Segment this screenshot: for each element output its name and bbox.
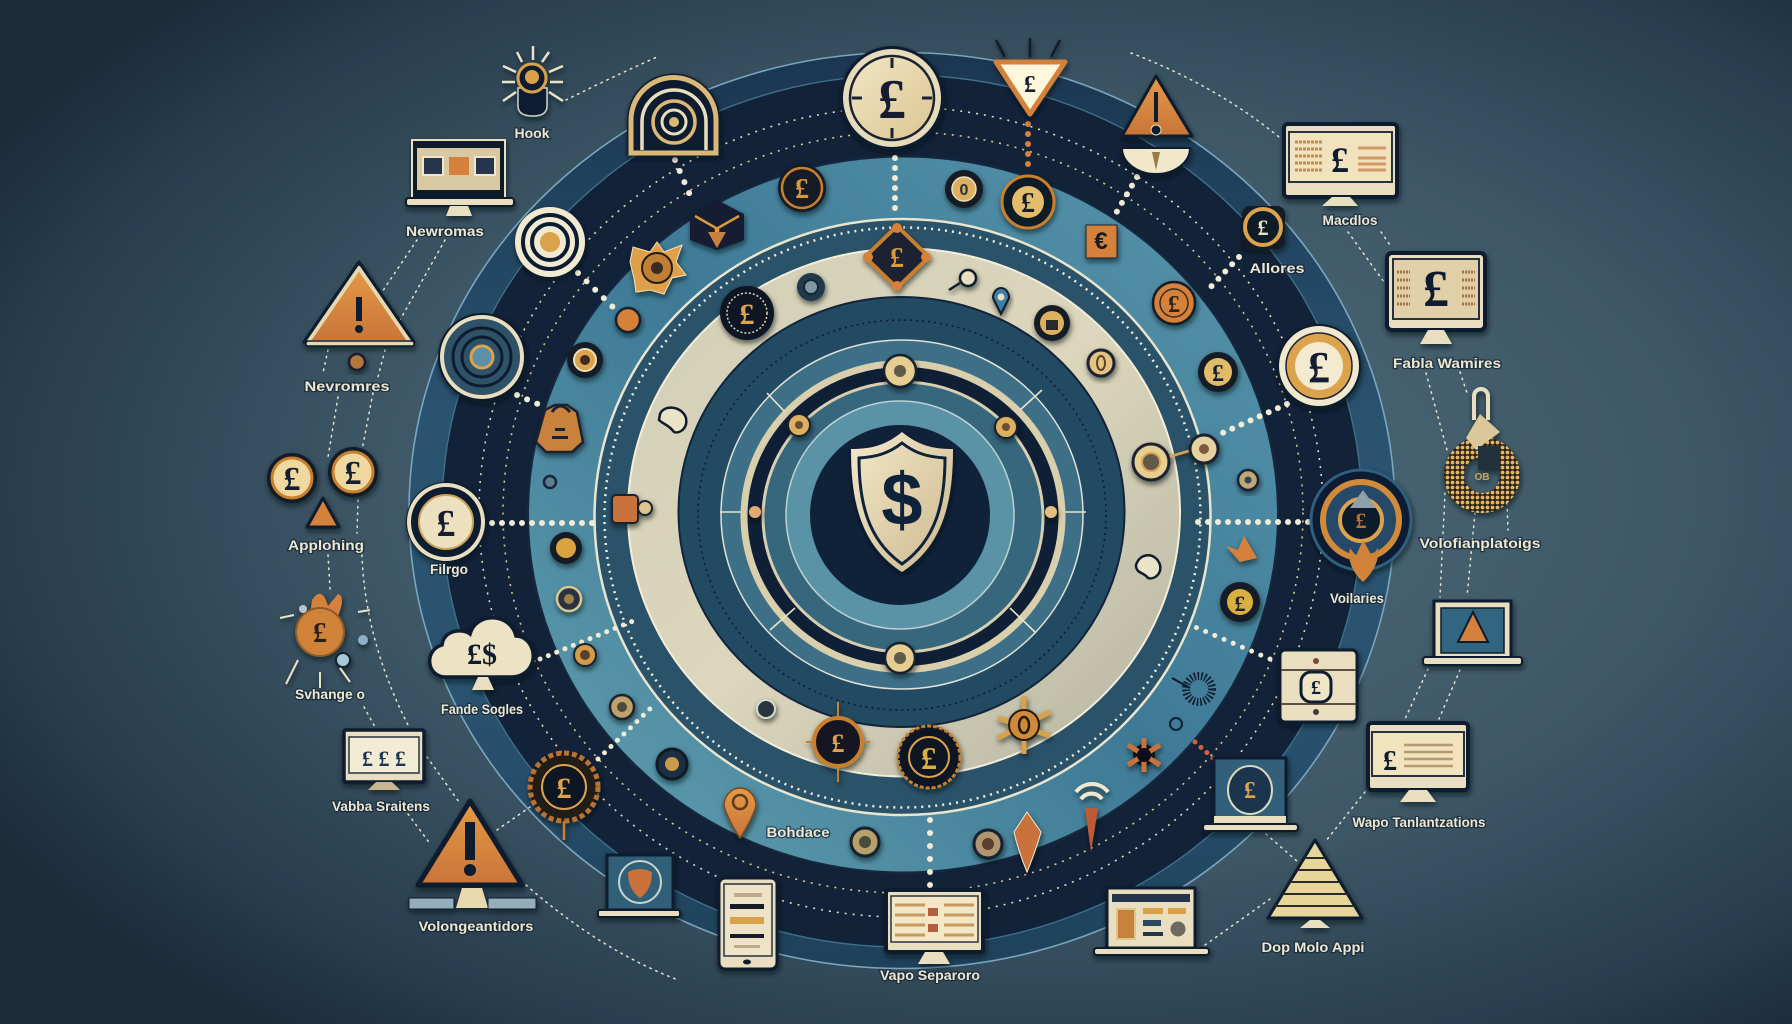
icon: tablet pound [1280,650,1357,722]
connector dots [492,124,1308,886]
icon: arrow kite [1014,812,1041,872]
label: Nevromres: Nevromres [304,378,390,394]
label: Volongeantidors: Volongeantidors [418,918,534,934]
icon: round gold badge [898,726,960,788]
icon: pin orange [724,788,756,838]
icon: pyramid [1268,840,1362,928]
icon: laptop newromas [406,140,514,216]
label: Wapo Tanlantzations: Wapo Tanlantzations [1352,814,1486,830]
icon: urchin [1172,676,1212,702]
arc: right mid b [1460,372,1467,393]
pound sign: £ [1311,677,1321,699]
left dot [749,506,761,518]
arc: left a [328,555,330,589]
icon: ornate coin allores: £ [1258,215,1268,240]
ring: inner dark teal band [678,297,1124,727]
label: Macdlos: Macdlos [1322,212,1378,228]
arc: monitor to pyramid [1325,792,1365,842]
icon: triangle pound [996,38,1065,114]
icon: target left [438,313,526,401]
pound sign: £ [1308,343,1330,392]
icon: orange square: € [1094,228,1108,255]
icon: ornate coin allores [1242,206,1285,249]
ring: pale teal ring [786,401,1014,629]
coin [657,749,687,779]
dots: right target row [1195,519,1308,525]
icon: heart outline left [659,408,686,432]
right dot [1045,506,1057,518]
arc: tablet to pyramid [1266,834,1298,862]
icon: monitor bottom [886,890,983,964]
icon: coin bottom right [974,830,1002,858]
label: Filrgo: Filrgo [430,561,468,577]
small triangle [307,498,339,527]
icon: big pound circle right [1278,325,1360,407]
label: Svhange o: Svhange o [295,686,365,702]
arc: under triangle b [378,350,385,377]
icon: target coin inner left [806,702,870,782]
arc: hook [566,57,657,100]
label: Vapo Separoro: Vapo Separoro [880,967,980,983]
icon: orange coin top: £ [795,174,809,205]
icon: spider [1128,738,1160,772]
icon: laptop blue shield [598,855,680,917]
icon: monitor macdlos [1284,124,1397,206]
label: Volofianplatoigs: Volofianplatoigs [1420,535,1541,551]
label: Vabba Sraitens: Vabba Sraitens [332,798,430,814]
dots: tablet [1195,627,1270,659]
arc: top right [1131,53,1279,137]
icon: small oval coin [1088,350,1114,376]
arc: right mid c [1440,493,1445,597]
icon: orange dot [616,308,640,332]
icon: ornate pound badge: £ [556,772,572,805]
arc: right low b [1439,670,1460,719]
icon: cloud pound [430,618,533,690]
label: Voilaries: Voilaries [1330,590,1384,606]
dots: clock to coin [892,158,898,214]
arc: under triangle a [323,350,328,373]
arc: laptop to pyramid [1205,899,1270,945]
icon: small ring coin [567,342,603,378]
arc: right mid d [1467,513,1475,597]
icon: gold coin ring [1002,176,1054,228]
pound sign: £ [1423,261,1449,318]
icon: diamond coin [863,223,931,291]
arc: mid left c [357,500,358,533]
icon: orange square [1086,225,1117,258]
coin [1190,435,1218,463]
icon: diamond coin: £ [890,243,904,274]
icon: target coin inner left: £ [832,729,844,758]
icon: heart outline right [1136,555,1160,578]
icon: orange pound coin [1153,282,1195,324]
coin [1133,444,1169,480]
icon: navy pound coin [720,286,774,340]
top coin [884,355,916,387]
pound sign: £ [878,69,906,131]
arc: right upper b [1381,232,1392,248]
icon: orange sun coin left: £ [313,618,327,649]
icon: rocket target right: £ [1356,508,1366,533]
ring: inner cream outline [763,382,1043,652]
dots: badge [598,704,655,759]
pound sign: £ [1383,746,1397,777]
icon: orange pound coin: £ [1168,292,1180,318]
icon: phone [719,878,777,969]
icon: small gold coin [945,170,983,208]
coin [574,644,596,666]
ring: inner dotted orbit [503,132,1303,893]
icon: small loop [1170,718,1182,730]
arc: lower left [526,885,678,980]
icon: ornate pound badge [530,753,598,840]
icon: spiky sun coin [630,242,686,294]
icon: left pound circle [406,482,486,562]
icon: coin bottom left [851,828,879,856]
icon: warning with bowl [1122,76,1192,174]
icon: blue pin [993,288,1009,314]
icon: coin right lower [1220,582,1260,622]
ring: outer blue band [409,52,1395,968]
dots: arch to hex [675,160,692,200]
dots: triangle to coin [1025,124,1031,168]
icon: hexagon badge [690,200,744,250]
ring: white dotted orbit [604,228,1200,808]
arc: right low a [1405,669,1428,719]
label: Bohdace: Bohdace [766,824,830,840]
dots: left circle row [492,520,600,526]
label: Fabla Wamires: Fabla Wamires [1393,355,1501,371]
label: Dop Molo Appi: Dop Molo Appi [1262,939,1364,955]
icon: orange coin top [778,164,826,212]
icon: rocket target right [1311,470,1411,582]
pound sign: £ [1024,72,1036,98]
label: Applohing: Applohing [288,537,364,553]
arc: mid left a [328,397,338,457]
icon: coin pair and triangle [267,447,378,527]
icon: left coin stack [550,532,775,779]
coin [557,587,581,611]
icon: small coin right [1238,470,1258,490]
pound sign: £ [1331,140,1349,180]
icon: coin right lower: £ [1234,591,1246,616]
dollar sign: $ [881,458,923,541]
icon: orange arrow [1226,536,1257,562]
icon: orange sun coin left [280,594,370,688]
coin [757,700,775,718]
arc: right upper a [1348,232,1384,282]
ring: cream band [628,248,1180,776]
icon: clock pound [840,46,944,150]
ring: navy band [442,75,1362,947]
icon: monitor wapo [1368,723,1468,802]
icon: coin pair connector right [1133,435,1218,480]
icon: laptop warning [1423,601,1522,665]
icon: navy pound coin: £ [740,298,754,331]
icon: gold coin ring: £ [1021,188,1035,219]
icon: orange bag [536,405,583,452]
icon: spiral coin [515,207,585,277]
arc: right mid a [1426,373,1447,450]
dots: target to bag [517,395,540,405]
outer dashed arcs [323,53,1508,980]
icon: padlock tag left [612,495,652,523]
label: Hook: Hook [514,125,550,141]
ring: steel band [721,340,1083,689]
inner ticks [720,390,1086,633]
dots: bottom monitor [927,820,933,886]
ring: dark teal band [594,219,1210,815]
arc: top left b [400,240,445,320]
icon: hook light bulb [502,46,563,116]
icon: small gold coin: 0 [960,182,969,199]
concentric rings diagram [409,52,1395,968]
icon: laptop blue lock: £ [1244,778,1256,804]
arc: mid left b [362,393,373,450]
icon: tiny dot left [544,476,556,488]
arc: warning to badge [497,807,530,830]
coin right: £ [344,455,362,492]
coin [610,695,634,719]
icon: medium coin: £ [1212,361,1224,387]
arc: left b [362,555,408,725]
icon: grey coin [797,273,825,301]
ring: teal band [528,156,1278,872]
label: Newromas: Newromas [406,223,484,239]
dots: spiral to dot [578,273,616,310]
ring: outer dotted orbit [479,107,1323,917]
icon: hook coil: OB [1474,472,1490,483]
dots: big circle to small coin [1218,404,1287,435]
icon: warning left [304,262,414,346]
arc: left c [364,707,375,727]
icon: hook coil [1454,389,1510,503]
icon: lock coin [1034,305,1070,341]
icon: medium coin [1198,352,1238,392]
dots: spider to laptop [1195,742,1214,759]
pound sign: £ [436,503,456,545]
icon: wifi with spike [1076,784,1108,852]
icon: coins on inner ring [749,355,1057,673]
dots: warning to square [1112,177,1137,220]
label: Allores: Allores [1250,260,1305,276]
icon: round gold badge: £ [921,740,937,776]
icon: laptop blue lock [1203,758,1298,831]
ring: dark dotted orbit [698,320,1106,710]
icon: laptop dashboard [1094,888,1209,955]
icon: sun wheel inner right [998,696,1050,754]
label: Fande Sogles: Fande Sogles [441,701,523,717]
pounds: £ £ £ [362,746,406,771]
arc: left e [408,814,431,845]
arc: top left a [382,240,417,292]
dots: coin to orange coin [1205,257,1239,293]
icon: centre shield with dollar [851,432,953,572]
dots: cloud [540,619,638,659]
icon: small coin [349,354,365,370]
connector [1165,450,1192,458]
icon: arch maze [627,74,720,155]
right coin [995,416,1017,438]
arc: left d [427,757,459,802]
coin left: £ [284,461,300,498]
pound text: £$ [467,638,497,671]
left coin [788,414,810,436]
icon: big warning [409,801,536,909]
ring: cream outline [744,364,1062,670]
icon: monitor triple pound [344,730,424,790]
bottom coin [885,643,915,673]
centre navy disc [810,425,990,605]
icon: magnifier [949,270,976,290]
arc: right mid e [1507,503,1508,530]
icon: monitor fabla [1387,253,1485,344]
coin [550,532,582,564]
